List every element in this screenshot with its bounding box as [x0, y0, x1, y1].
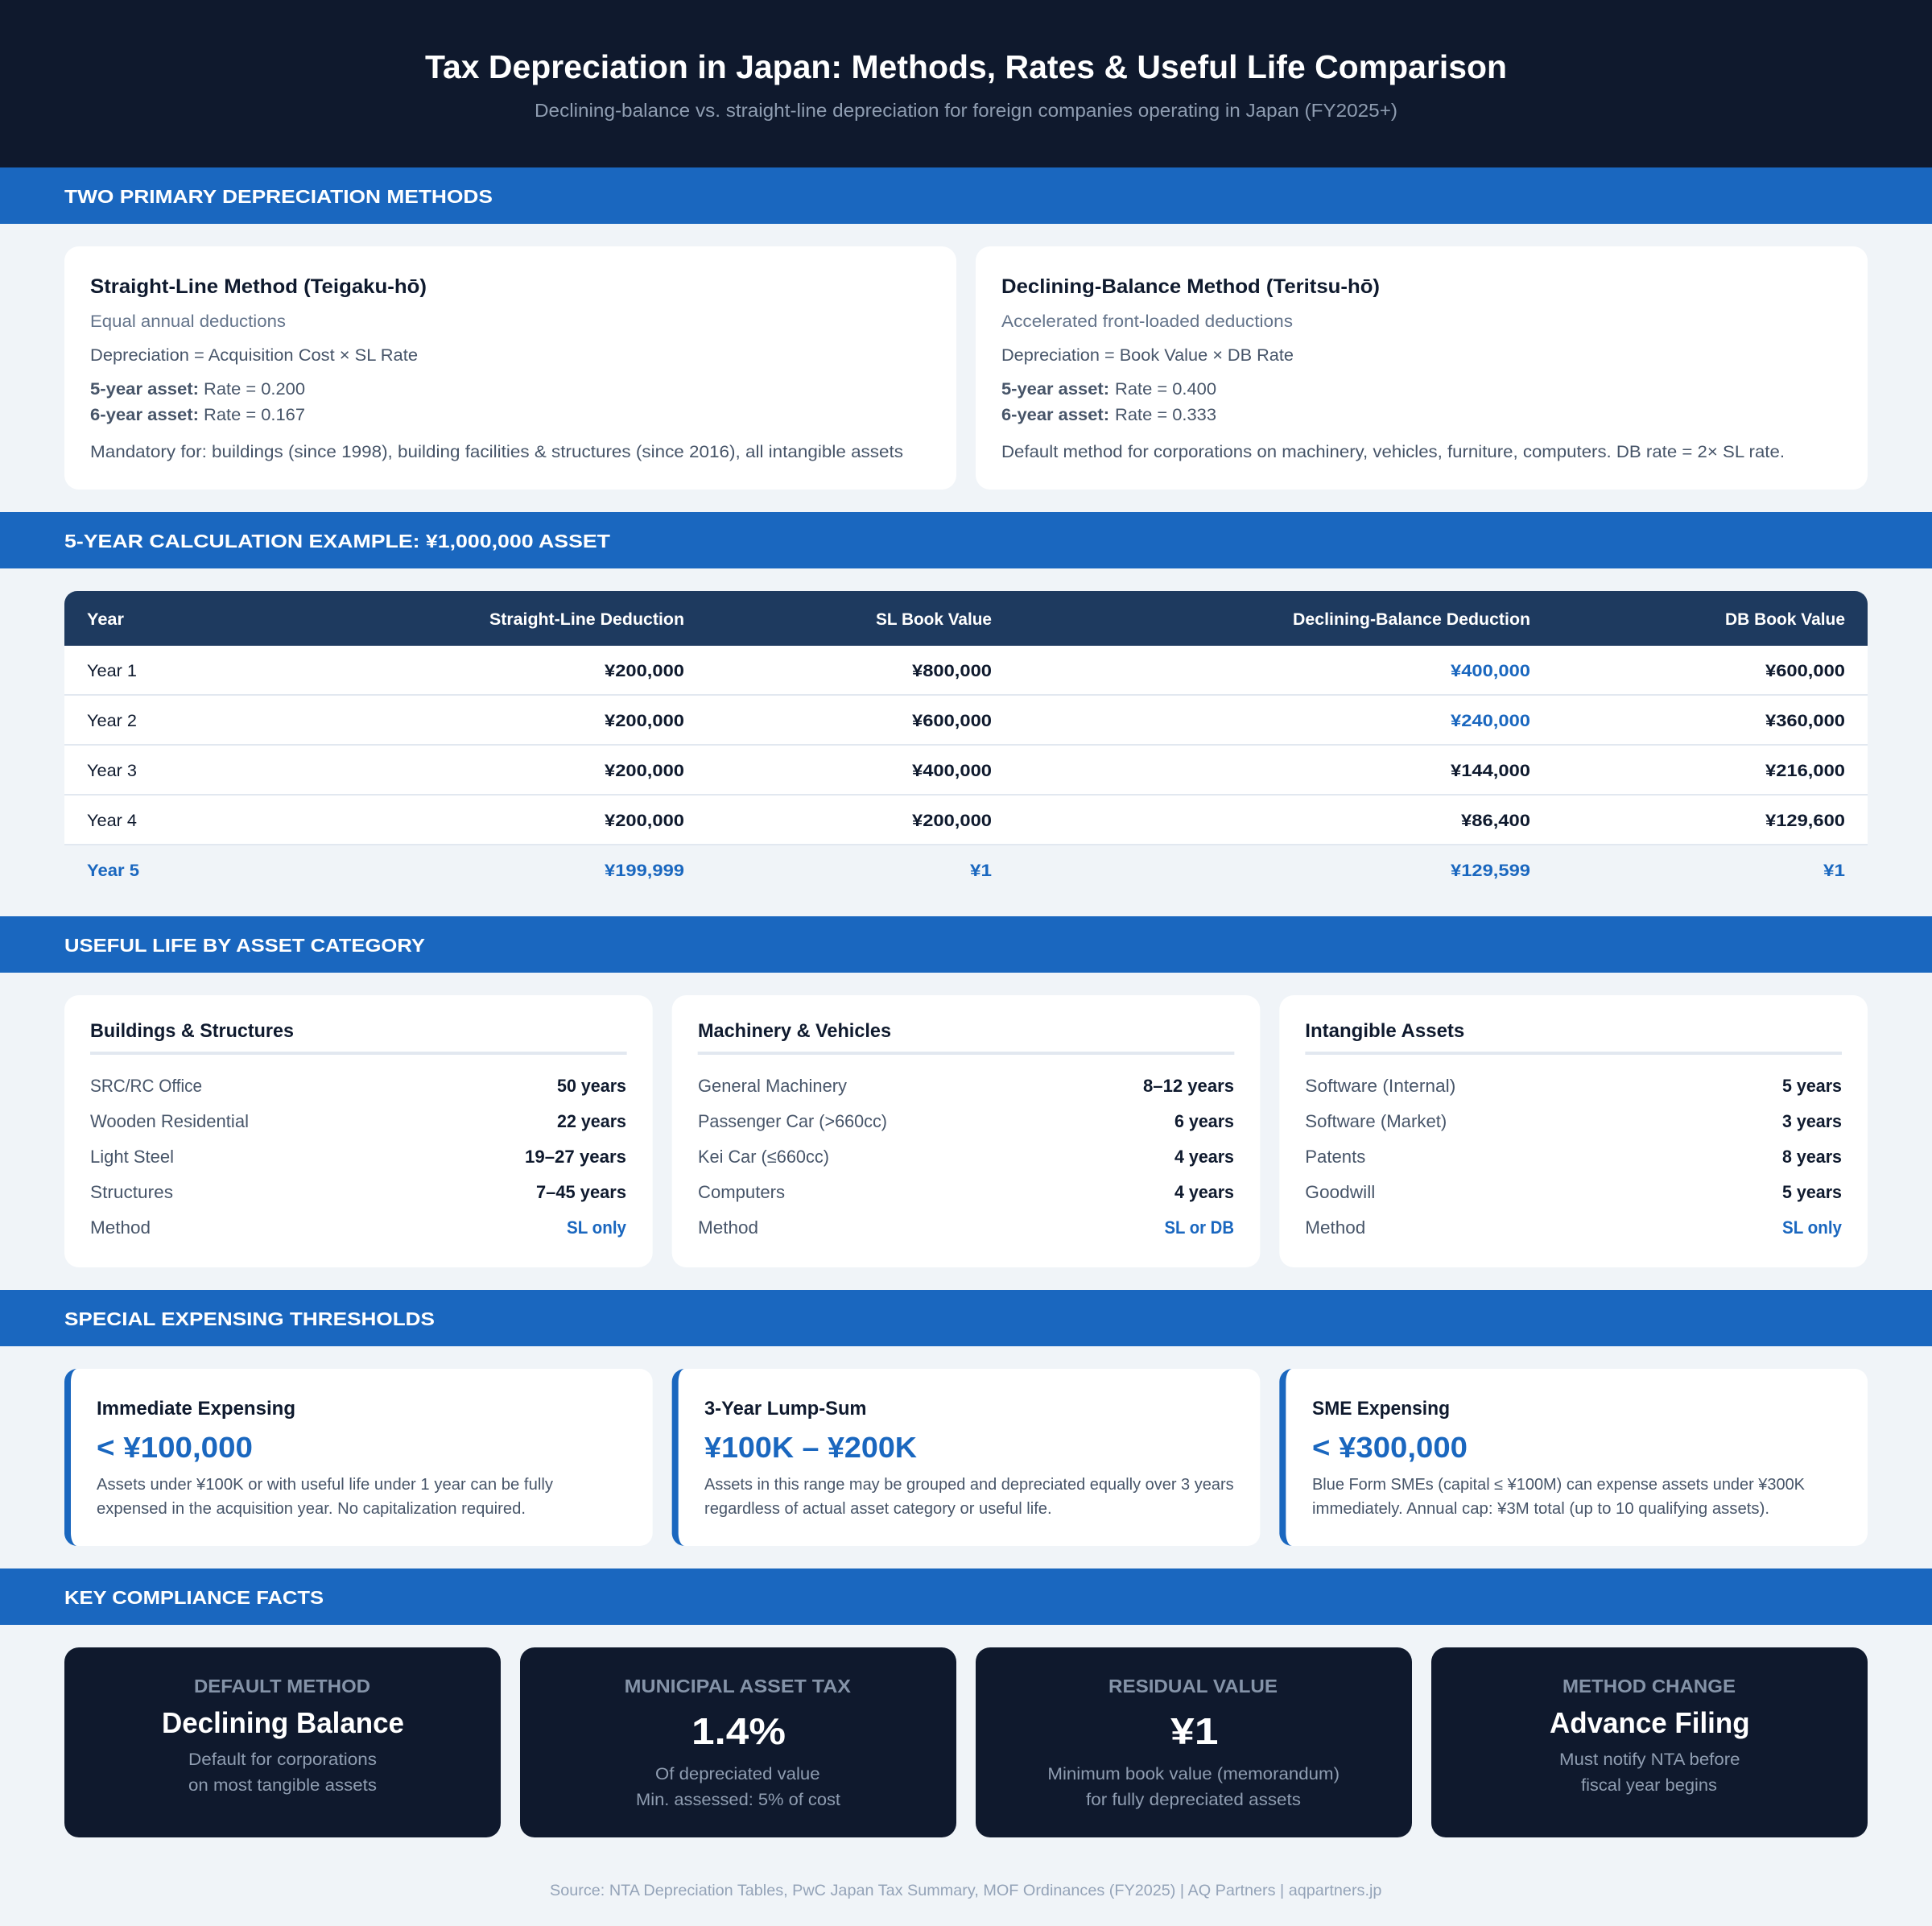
row: year 1: ¥200,000 [605, 661, 684, 680]
row: wooden residential [90, 1111, 626, 1131]
row: method: Method [698, 1217, 758, 1238]
row: year 3 [64, 746, 1868, 796]
row: software market: Software (Market) [1305, 1111, 1447, 1131]
row: year 3: ¥200,000 [605, 761, 684, 780]
stat label: METHOD CHANGE [1563, 1676, 1736, 1697]
row: year 4: ¥200,000 [605, 811, 684, 830]
row: kei car: Kei Car (≤660cc) [698, 1147, 829, 1167]
description [1312, 1476, 1806, 1518]
section heading: useful life by asset category: USEFUL LIFE BY ASSET CATEGORY [64, 935, 425, 956]
stat label: MUNICIPAL ASSET TAX [625, 1676, 852, 1697]
5-year rate: 5-year asset: [90, 380, 199, 399]
stat description [1559, 1750, 1740, 1795]
row: method: SL only [1782, 1217, 1843, 1238]
stat card: method change [1431, 1647, 1868, 1837]
row: general machinery [698, 1076, 1234, 1096]
panel: straight-line method [64, 246, 956, 490]
section heading: 5-year calculation example [0, 512, 1932, 568]
5-year rate [1001, 380, 1216, 399]
panel: intangible assets [1279, 995, 1868, 1267]
card subheading: Equal annual deductions [90, 312, 286, 331]
row: year 4 [64, 796, 1868, 845]
stat description: fiscal year begins [1581, 1776, 1717, 1795]
stat description: on most tangible assets [188, 1776, 377, 1795]
row: passenger car: 6 years [1174, 1111, 1234, 1131]
row: year 3: Year 3 [87, 761, 137, 780]
table header row: Declining-Balance Deduction [1293, 610, 1530, 629]
card heading: Immediate Expensing [97, 1398, 295, 1420]
row: goodwill: 5 years [1782, 1182, 1842, 1202]
row: method: Method [1305, 1217, 1365, 1238]
section heading: special expensing thresholds [0, 1290, 1932, 1346]
row: software market: 3 years [1782, 1111, 1842, 1131]
row: SRC/RC office [90, 1076, 626, 1096]
description: expensed in the acquisition year. No capitalization required. [97, 1500, 526, 1518]
row: method [698, 1217, 1234, 1238]
card heading: Machinery & Vehicles [698, 1020, 891, 1042]
row: software market [1305, 1111, 1842, 1131]
panel: 3-year lump-sum [672, 1369, 1260, 1546]
stat description: Minimum book value (memorandum) [1047, 1765, 1340, 1783]
panel: buildings and structures [64, 995, 653, 1267]
card heading: Buildings & Structures [90, 1020, 294, 1042]
stat card: municipal asset tax [520, 1647, 956, 1837]
stat card: residual value [976, 1647, 1412, 1837]
5-year rate [90, 380, 305, 399]
row: year 3: ¥216,000 [1765, 761, 1845, 780]
stat value: 1.4% [691, 1710, 786, 1752]
section heading: special expensing thresholds: SPECIAL EXPENSING THRESHOLDS [64, 1308, 435, 1329]
panel: machinery and vehicles [672, 995, 1260, 1267]
row: method: SL only [567, 1217, 627, 1238]
6-year rate: 6-year asset: [90, 406, 199, 424]
table header row [64, 591, 1868, 646]
row: year 5 highlighted: Year 5 [87, 861, 139, 880]
card heading: Declining-Balance Method (Teritsu-hō) [1001, 275, 1380, 298]
stat description: Default for corporations [188, 1750, 377, 1769]
section heading: key compliance facts: KEY COMPLIANCE FACTS [64, 1587, 324, 1608]
description: Assets under ¥100K or with useful life under 1 year can be fully [97, 1476, 553, 1494]
row: goodwill [1305, 1182, 1842, 1202]
stat label: RESIDUAL VALUE [1108, 1676, 1278, 1697]
row: method: SL or DB [1164, 1217, 1234, 1238]
row: patents [1305, 1147, 1842, 1167]
stat description: Must notify NTA before [1559, 1750, 1740, 1769]
card subheading: Accelerated front-loaded deductions [1001, 312, 1293, 331]
row: wooden residential: Wooden Residential [90, 1111, 249, 1131]
row: light steel: Light Steel [90, 1147, 174, 1167]
row: year 2 [64, 696, 1868, 746]
card heading: Straight-Line Method (Teigaku-hō) [90, 275, 427, 298]
row: year 5 highlighted [87, 861, 1845, 880]
row: kei car: 4 years [1174, 1147, 1234, 1167]
row: year 5 highlighted: ¥129,599 [1451, 861, 1530, 880]
stat description: Of depreciated value [655, 1765, 820, 1783]
row: year 2: ¥600,000 [912, 711, 992, 730]
6-year rate: Rate = 0.167 [204, 406, 305, 424]
row: software internal: Software (Internal) [1305, 1076, 1455, 1096]
table header row: Straight-Line Deduction [489, 610, 684, 629]
5-year rate: Rate = 0.200 [204, 380, 305, 399]
note: Mandatory for: buildings (since 1998), building facilities & structures (since 2016), all intangible assets [90, 443, 903, 461]
6-year rate: 6-year asset: [1001, 406, 1109, 424]
section heading: key compliance facts [0, 1568, 1932, 1625]
row: method [1305, 1217, 1843, 1238]
row: year 5 highlighted: ¥1 [1823, 861, 1845, 880]
description: Assets in this range may be grouped and depreciated equally over 3 years [704, 1476, 1234, 1494]
row: year 4: ¥86,400 [1461, 811, 1530, 830]
description: Blue Form SMEs (capital ≤ ¥100M) can expense assets under ¥300K [1312, 1476, 1806, 1494]
row: SRC/RC office: SRC/RC Office [90, 1076, 202, 1096]
formula: Depreciation = Acquisition Cost × SL Rate [90, 346, 418, 365]
5-year rate: 5-year asset: [1001, 380, 1109, 399]
row: method [90, 1217, 627, 1238]
row: patents: Patents [1305, 1147, 1365, 1167]
row: year 3: ¥144,000 [1451, 761, 1530, 780]
panel: declining-balance method [976, 246, 1868, 490]
row: SRC/RC office: 50 years [557, 1076, 626, 1096]
row: year 4: Year 4 [87, 811, 137, 830]
row: method: Method [90, 1217, 151, 1238]
row: structures: Structures [90, 1182, 173, 1202]
row: wooden residential: 22 years [557, 1111, 626, 1131]
formula: Depreciation = Book Value × DB Rate [1001, 346, 1294, 365]
note: Default method for corporations on machinery, vehicles, furniture, computers. DB rate = 2× SL rate. [1001, 443, 1785, 461]
section heading: two primary depreciation methods: TWO PRIMARY DEPRECIATION METHODS [64, 186, 493, 207]
row: computers [698, 1182, 1234, 1202]
row: year 4: ¥129,600 [1765, 811, 1845, 830]
source footer: Source: NTA Depreciation Tables, PwC Japan Tax Summary, MOF Ordinances (FY2025) | AQ Partners | aqpartners.jp [550, 1882, 1382, 1899]
row: general machinery: General Machinery [698, 1076, 847, 1096]
card heading: SME Expensing [1312, 1398, 1450, 1420]
row: passenger car: Passenger Car (>660cc) [698, 1111, 887, 1131]
description [97, 1476, 553, 1518]
threshold value: ¥100K – ¥200K [704, 1431, 917, 1464]
row: year 2: ¥200,000 [605, 711, 684, 730]
row: year 2: Year 2 [87, 711, 137, 730]
row: computers: 4 years [1174, 1182, 1234, 1202]
6-year rate: Rate = 0.333 [1115, 406, 1216, 424]
row: year 5 highlighted: ¥199,999 [605, 861, 684, 880]
row: year 5 highlighted: ¥1 [970, 861, 992, 880]
row: year 3: ¥400,000 [912, 761, 992, 780]
subtitle: Declining-balance vs. straight-line depreciation for foreign companies operating in Japan (FY2025+) [535, 100, 1397, 121]
row: year 4: ¥200,000 [912, 811, 992, 830]
row: structures: 7–45 years [536, 1182, 626, 1202]
table header row: Year [87, 610, 124, 629]
5-year rate: Rate = 0.400 [1115, 380, 1216, 399]
page header [0, 0, 1932, 167]
6-year rate [1001, 406, 1216, 424]
stat value: Declining Balance [162, 1706, 404, 1739]
stat description [1047, 1765, 1340, 1809]
row: patents: 8 years [1782, 1147, 1842, 1167]
row: light steel [90, 1147, 626, 1167]
row: passenger car [698, 1111, 1234, 1131]
row: computers: Computers [698, 1182, 785, 1202]
threshold value: < ¥300,000 [1312, 1431, 1468, 1464]
stat card: default method [64, 1647, 501, 1837]
section heading: 5-year calculation example: 5-YEAR CALCULATION EXAMPLE: ¥1,000,000 ASSET [64, 531, 611, 552]
table: calculation example [64, 591, 1868, 880]
row: year 1: ¥800,000 [912, 661, 992, 680]
card heading: 3-Year Lump-Sum [704, 1398, 866, 1420]
stat description: Min. assessed: 5% of cost [636, 1791, 840, 1809]
6-year rate [90, 406, 305, 424]
row: year 1: Year 1 [87, 661, 137, 680]
section heading: two primary depreciation methods [0, 167, 1932, 224]
row: year 1: ¥400,000 [1451, 661, 1530, 680]
row: light steel: 19–27 years [525, 1147, 626, 1167]
stat description [636, 1765, 840, 1809]
row: year 1: ¥600,000 [1765, 661, 1845, 680]
stat value: ¥1 [1170, 1710, 1219, 1752]
table header row: DB Book Value [1725, 610, 1845, 629]
row: software internal: 5 years [1782, 1076, 1842, 1096]
row: kei car [698, 1147, 1234, 1167]
threshold value: < ¥100,000 [97, 1431, 253, 1464]
stat value: Advance Filing [1550, 1706, 1750, 1739]
row: year 1 [64, 646, 1868, 696]
panel: SME expensing [1279, 1369, 1868, 1546]
stat label: DEFAULT METHOD [194, 1676, 370, 1697]
row: year 2: ¥240,000 [1451, 711, 1530, 730]
description: immediately. Annual cap: ¥3M total (up to 10 qualifying assets). [1312, 1500, 1769, 1518]
table header row: SL Book Value [876, 610, 992, 629]
description: regardless of actual asset category or useful life. [704, 1500, 1052, 1518]
row: year 2: ¥360,000 [1765, 711, 1845, 730]
panel: immediate expensing [64, 1369, 653, 1546]
description [704, 1476, 1234, 1518]
title: Tax Depreciation in Japan: Methods, Rates & Useful Life Comparison [425, 48, 1507, 85]
section heading: useful life by asset category [0, 916, 1932, 973]
row: software internal [1305, 1076, 1842, 1096]
row: structures [90, 1182, 626, 1202]
row: general machinery: 8–12 years [1143, 1076, 1234, 1096]
row: goodwill: Goodwill [1305, 1182, 1375, 1202]
stat description [188, 1750, 377, 1795]
card heading: Intangible Assets [1305, 1020, 1464, 1042]
stat description: for fully depreciated assets [1086, 1791, 1301, 1809]
